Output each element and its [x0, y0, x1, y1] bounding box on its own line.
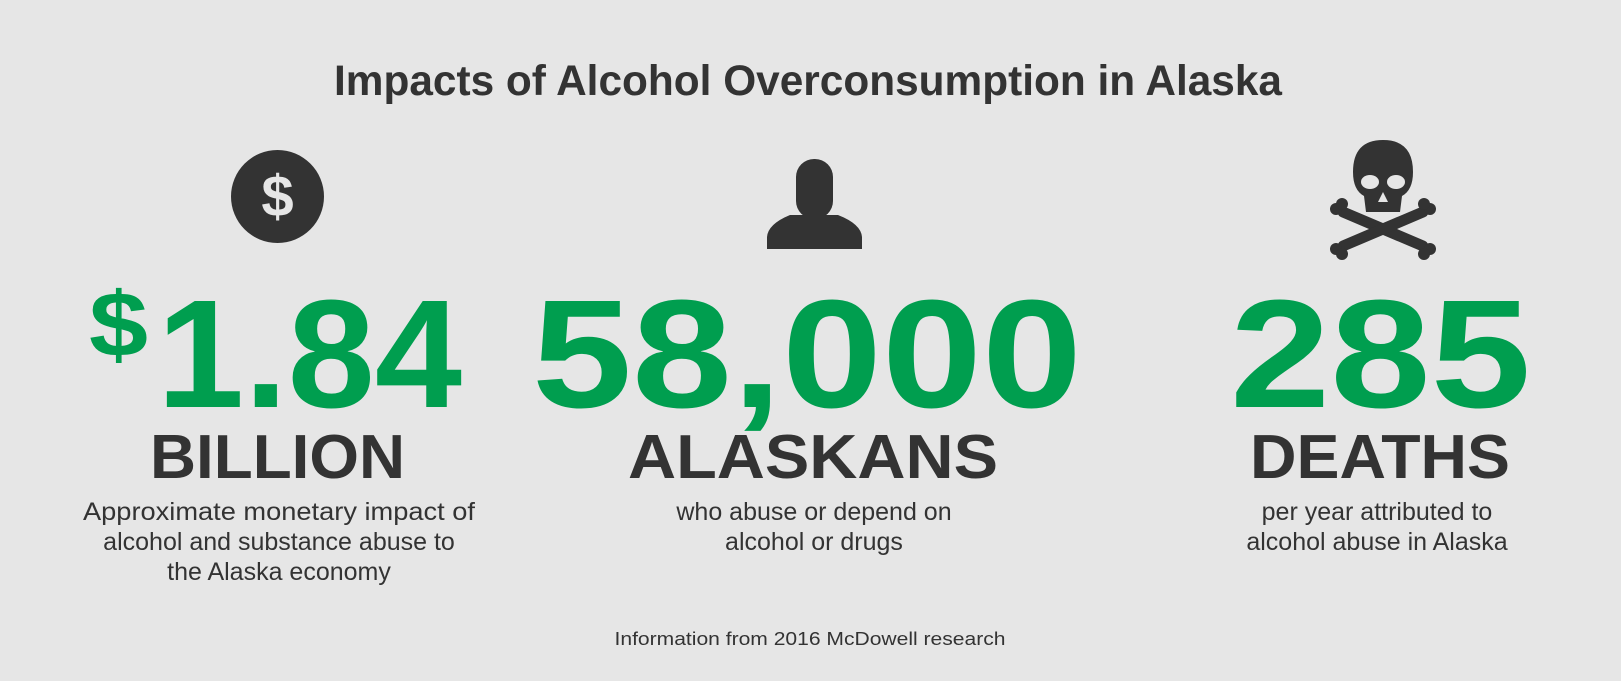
icon: person — [767, 159, 862, 249]
footer source: Information from 2016 McDowell research — [614, 629, 1006, 649]
big number: $1.84: $ — [89, 274, 148, 376]
description: Alaskans: who abuse or depend on — [675, 498, 952, 526]
big number: 285: 285 — [1230, 268, 1531, 440]
heading: DEATHS: DEATHS — [1250, 423, 1510, 492]
description: monetary: the Alaska economy — [167, 558, 391, 586]
big number: $1.84: 1.84 — [157, 268, 462, 440]
description: deaths: alcohol abuse in Alaska — [1246, 528, 1508, 556]
title: Impacts of Alcohol Overconsumption in Alaska — [334, 57, 1283, 105]
icon: dollar coin — [231, 150, 324, 243]
description: monetary: Approximate monetary impact of — [83, 498, 475, 526]
panel: monetary impact — [83, 150, 475, 586]
panel: Alaskans — [532, 159, 1082, 556]
icon: skull and crossbones — [1330, 140, 1436, 260]
heading: BILLION: BILLION — [150, 423, 405, 492]
description: Alaskans: alcohol or drugs — [725, 528, 903, 556]
icon: dollar coin: $ — [261, 164, 294, 229]
big number: 58,000: 58,000 — [532, 268, 1082, 440]
heading: ALASKANS: ALASKANS — [628, 423, 998, 492]
description: deaths: per year attributed to — [1262, 498, 1492, 526]
panel: deaths — [1230, 140, 1531, 556]
description: monetary: alcohol and substance abuse to — [103, 528, 455, 556]
